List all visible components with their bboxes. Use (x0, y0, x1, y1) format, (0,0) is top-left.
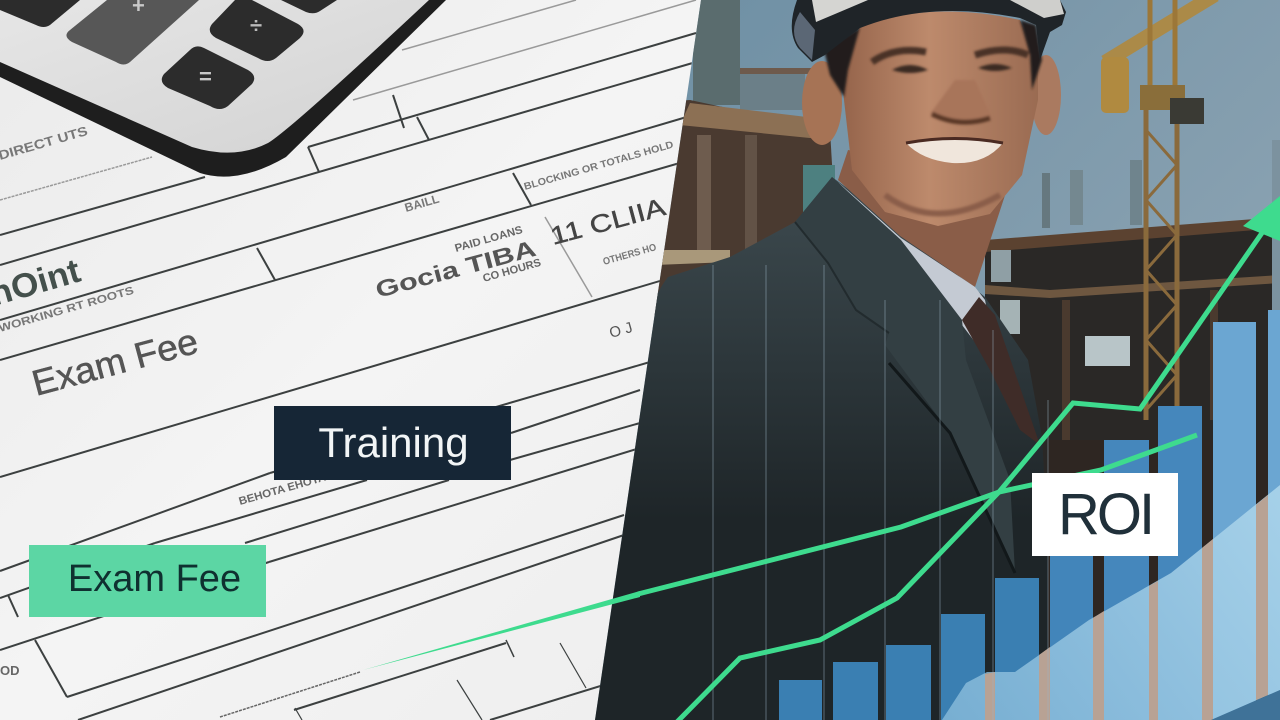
tan gaps under area (985, 495, 1268, 720)
lapel (795, 177, 1015, 573)
panel: tax form paper (0, 0, 710, 720)
text block: form text: OTHERS HO (602, 242, 658, 268)
label: Exam Fee: Exam Fee (68, 558, 241, 600)
eyebrows (872, 50, 926, 62)
text block: form text: 11 CLIIA (547, 193, 669, 251)
suit jacket (590, 177, 1049, 720)
hair (824, 27, 860, 97)
icon: tower crane (1101, 0, 1215, 420)
text block: form text: Exam Fee (27, 320, 202, 404)
text block: form text: CO HOURS (482, 257, 543, 285)
mouth (906, 140, 1003, 163)
panel: construction background photo (590, 0, 1280, 720)
text block: form text: BLOCKING OR TOTALS HOLD (523, 140, 675, 193)
icon: calculator: = (199, 64, 212, 89)
illustration: man in suit and hard hat (590, 0, 1066, 720)
text block: form text: O J (607, 319, 635, 342)
tie (962, 297, 1040, 445)
face (840, 11, 1038, 226)
shirt (838, 182, 986, 340)
chin shadow (885, 195, 1000, 214)
ears (802, 61, 842, 145)
line chart: lower green trend line (363, 435, 1197, 670)
neck (838, 150, 1010, 287)
darker bars below area (1211, 690, 1280, 720)
text block: form text: WORKING RT ROOTS (0, 285, 135, 335)
building under construction, left (654, 0, 835, 316)
label: ROI (1032, 473, 1178, 556)
area chart (942, 485, 1280, 720)
text block: form text: BEHOTA EHOTA (238, 472, 327, 508)
bar chart (779, 310, 1280, 720)
text block: form text: Gocia TIBA (373, 235, 539, 303)
icon: calculator: ÷ (250, 13, 262, 38)
nose shadow (932, 80, 977, 118)
text block: form text: OD (0, 663, 20, 678)
text block: form text: PAID LOANS (454, 224, 524, 255)
arrow: upper green growth arrow (677, 196, 1280, 720)
text block: form text: BAILL (403, 192, 441, 215)
icon: hard hat (792, 0, 1066, 62)
eyes (892, 65, 928, 73)
dark gaps behind chart (1048, 440, 1268, 700)
form lines (0, 33, 696, 720)
label: Exam Fee (29, 545, 266, 617)
label: Training: Training (318, 419, 469, 466)
text block: form text (0, 123, 675, 678)
building under construction, right (985, 160, 1280, 480)
vertical chart lines (713, 265, 1048, 720)
label: Training (274, 406, 511, 480)
icon: calculator (0, 0, 446, 177)
label: ROI: ROI (1058, 482, 1152, 547)
